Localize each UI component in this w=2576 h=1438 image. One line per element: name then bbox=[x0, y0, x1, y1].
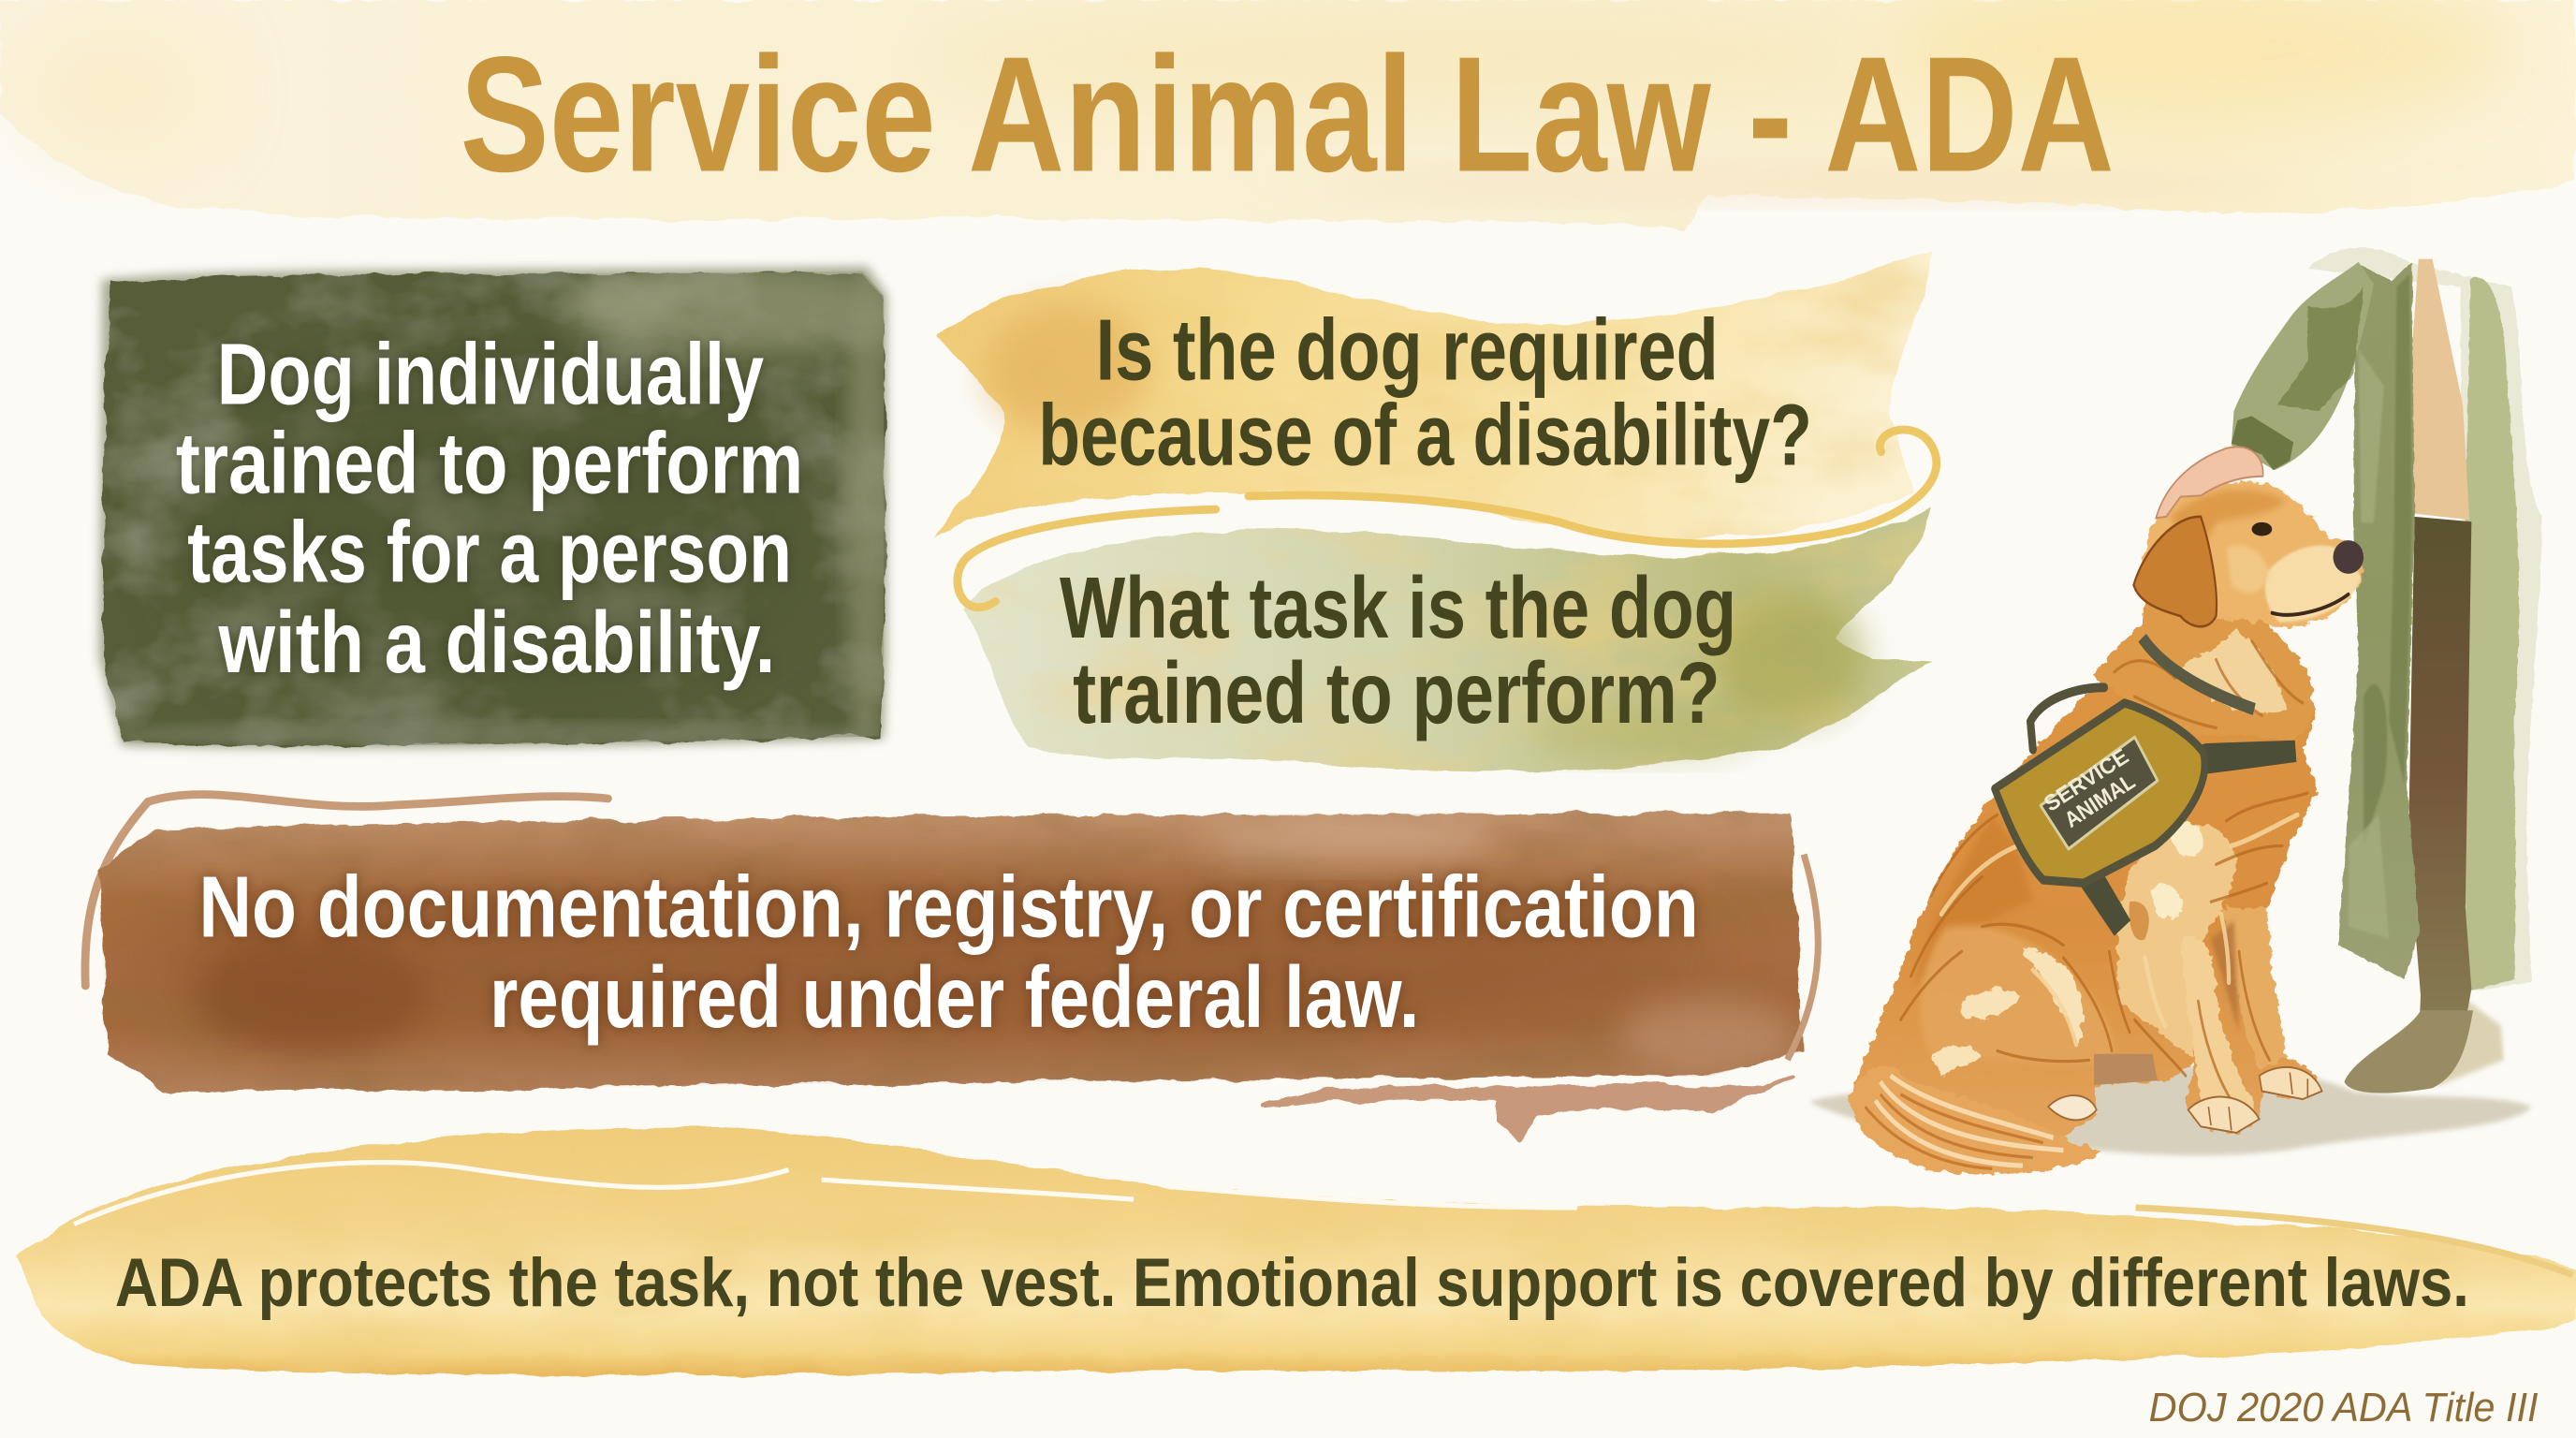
paws bbox=[2188, 1067, 2322, 1133]
brush tail top left bbox=[85, 795, 607, 986]
mouth bbox=[2272, 594, 2349, 615]
source citation: DOJ 2020 ADA Title III bbox=[2149, 1385, 2539, 1431]
trouser leg bbox=[2408, 517, 2471, 1023]
dog body bbox=[1849, 623, 2322, 1174]
coat folds bbox=[2364, 274, 2412, 845]
cream thigh patches bbox=[1931, 948, 2083, 1076]
harness strap bbox=[2173, 741, 2296, 778]
muzzle bbox=[2265, 546, 2361, 623]
eye bbox=[2252, 522, 2272, 536]
panel: no documentation required bbox=[85, 795, 1818, 1140]
fur strokes bbox=[1900, 793, 2307, 1100]
crown shade bbox=[2171, 490, 2288, 560]
text: definition: trained to perform bbox=[176, 415, 803, 512]
vest handle bbox=[2030, 687, 2104, 750]
vest bbox=[1995, 703, 2204, 883]
text: definition bbox=[176, 326, 803, 691]
text: definition: tasks for a person bbox=[187, 503, 792, 600]
white streak bbox=[74, 1163, 1577, 1224]
lower strap bbox=[2066, 849, 2130, 936]
decorative curl bbox=[958, 509, 1216, 608]
text: no documentation: No documentation, registry, or certification bbox=[198, 858, 1699, 955]
panel: ADA protects the task bbox=[17, 1127, 2576, 1375]
illustration: service dog and handler bbox=[1809, 248, 2541, 1174]
ear bbox=[2133, 517, 2217, 626]
haunch bbox=[1921, 925, 2115, 1065]
cheek light bbox=[2226, 546, 2270, 594]
vest patch label bbox=[2041, 744, 2146, 838]
vest patch bbox=[2041, 737, 2158, 849]
back shading bbox=[1913, 814, 2033, 989]
decorative curl bbox=[1249, 430, 1937, 544]
panel: trained dog definition bbox=[98, 263, 920, 756]
brush tail bottom right bbox=[1265, 1077, 1794, 1140]
vest patch label: ANIMAL bbox=[2060, 770, 2140, 833]
coat right panel bbox=[2466, 277, 2519, 991]
text: question one bbox=[1038, 301, 1812, 484]
shoe bbox=[2344, 1010, 2473, 1093]
text: no documentation bbox=[198, 858, 1699, 1046]
cuff bbox=[2232, 416, 2293, 470]
nose bbox=[2334, 540, 2364, 574]
text: question one: because of a disability? bbox=[1038, 387, 1812, 484]
text: question two: What task is the dog bbox=[1060, 559, 1736, 656]
tail bbox=[1849, 1065, 2101, 1174]
coat front bbox=[2338, 262, 2420, 979]
text: definition: Dog individually bbox=[217, 326, 764, 423]
ruff and neck bbox=[2094, 523, 2313, 741]
text: question two: trained to perform? bbox=[1073, 644, 1720, 741]
front leg bbox=[2180, 936, 2254, 1109]
title watercolor wash bbox=[0, 0, 2576, 230]
banner: what task is the dog trained bbox=[958, 506, 1935, 772]
text: question two bbox=[1060, 559, 1736, 741]
title: Service Animal Law - ADA bbox=[460, 23, 2115, 207]
coat back wash bbox=[2307, 248, 2541, 991]
far leg bbox=[2221, 908, 2288, 1069]
hind paw bbox=[2048, 1095, 2097, 1120]
sleeve bbox=[2232, 262, 2374, 470]
floor patch under belly bbox=[2094, 1054, 2158, 1085]
text: definition: with a disability. bbox=[218, 594, 775, 691]
text: no documentation: required under federal law. bbox=[490, 948, 1419, 1046]
shoe shadow bbox=[2389, 995, 2504, 1085]
hand bbox=[2156, 447, 2263, 518]
chest fur bbox=[2117, 824, 2236, 1057]
vest patch label: SERVICE bbox=[2041, 744, 2133, 817]
text: question one: Is the dog required bbox=[1096, 301, 1719, 398]
head bbox=[2135, 482, 2364, 627]
ground shadow bbox=[1809, 1065, 2531, 1155]
banner: required because of a disability bbox=[936, 252, 1937, 544]
collar bbox=[2143, 638, 2254, 710]
tan lining bbox=[2412, 259, 2469, 520]
